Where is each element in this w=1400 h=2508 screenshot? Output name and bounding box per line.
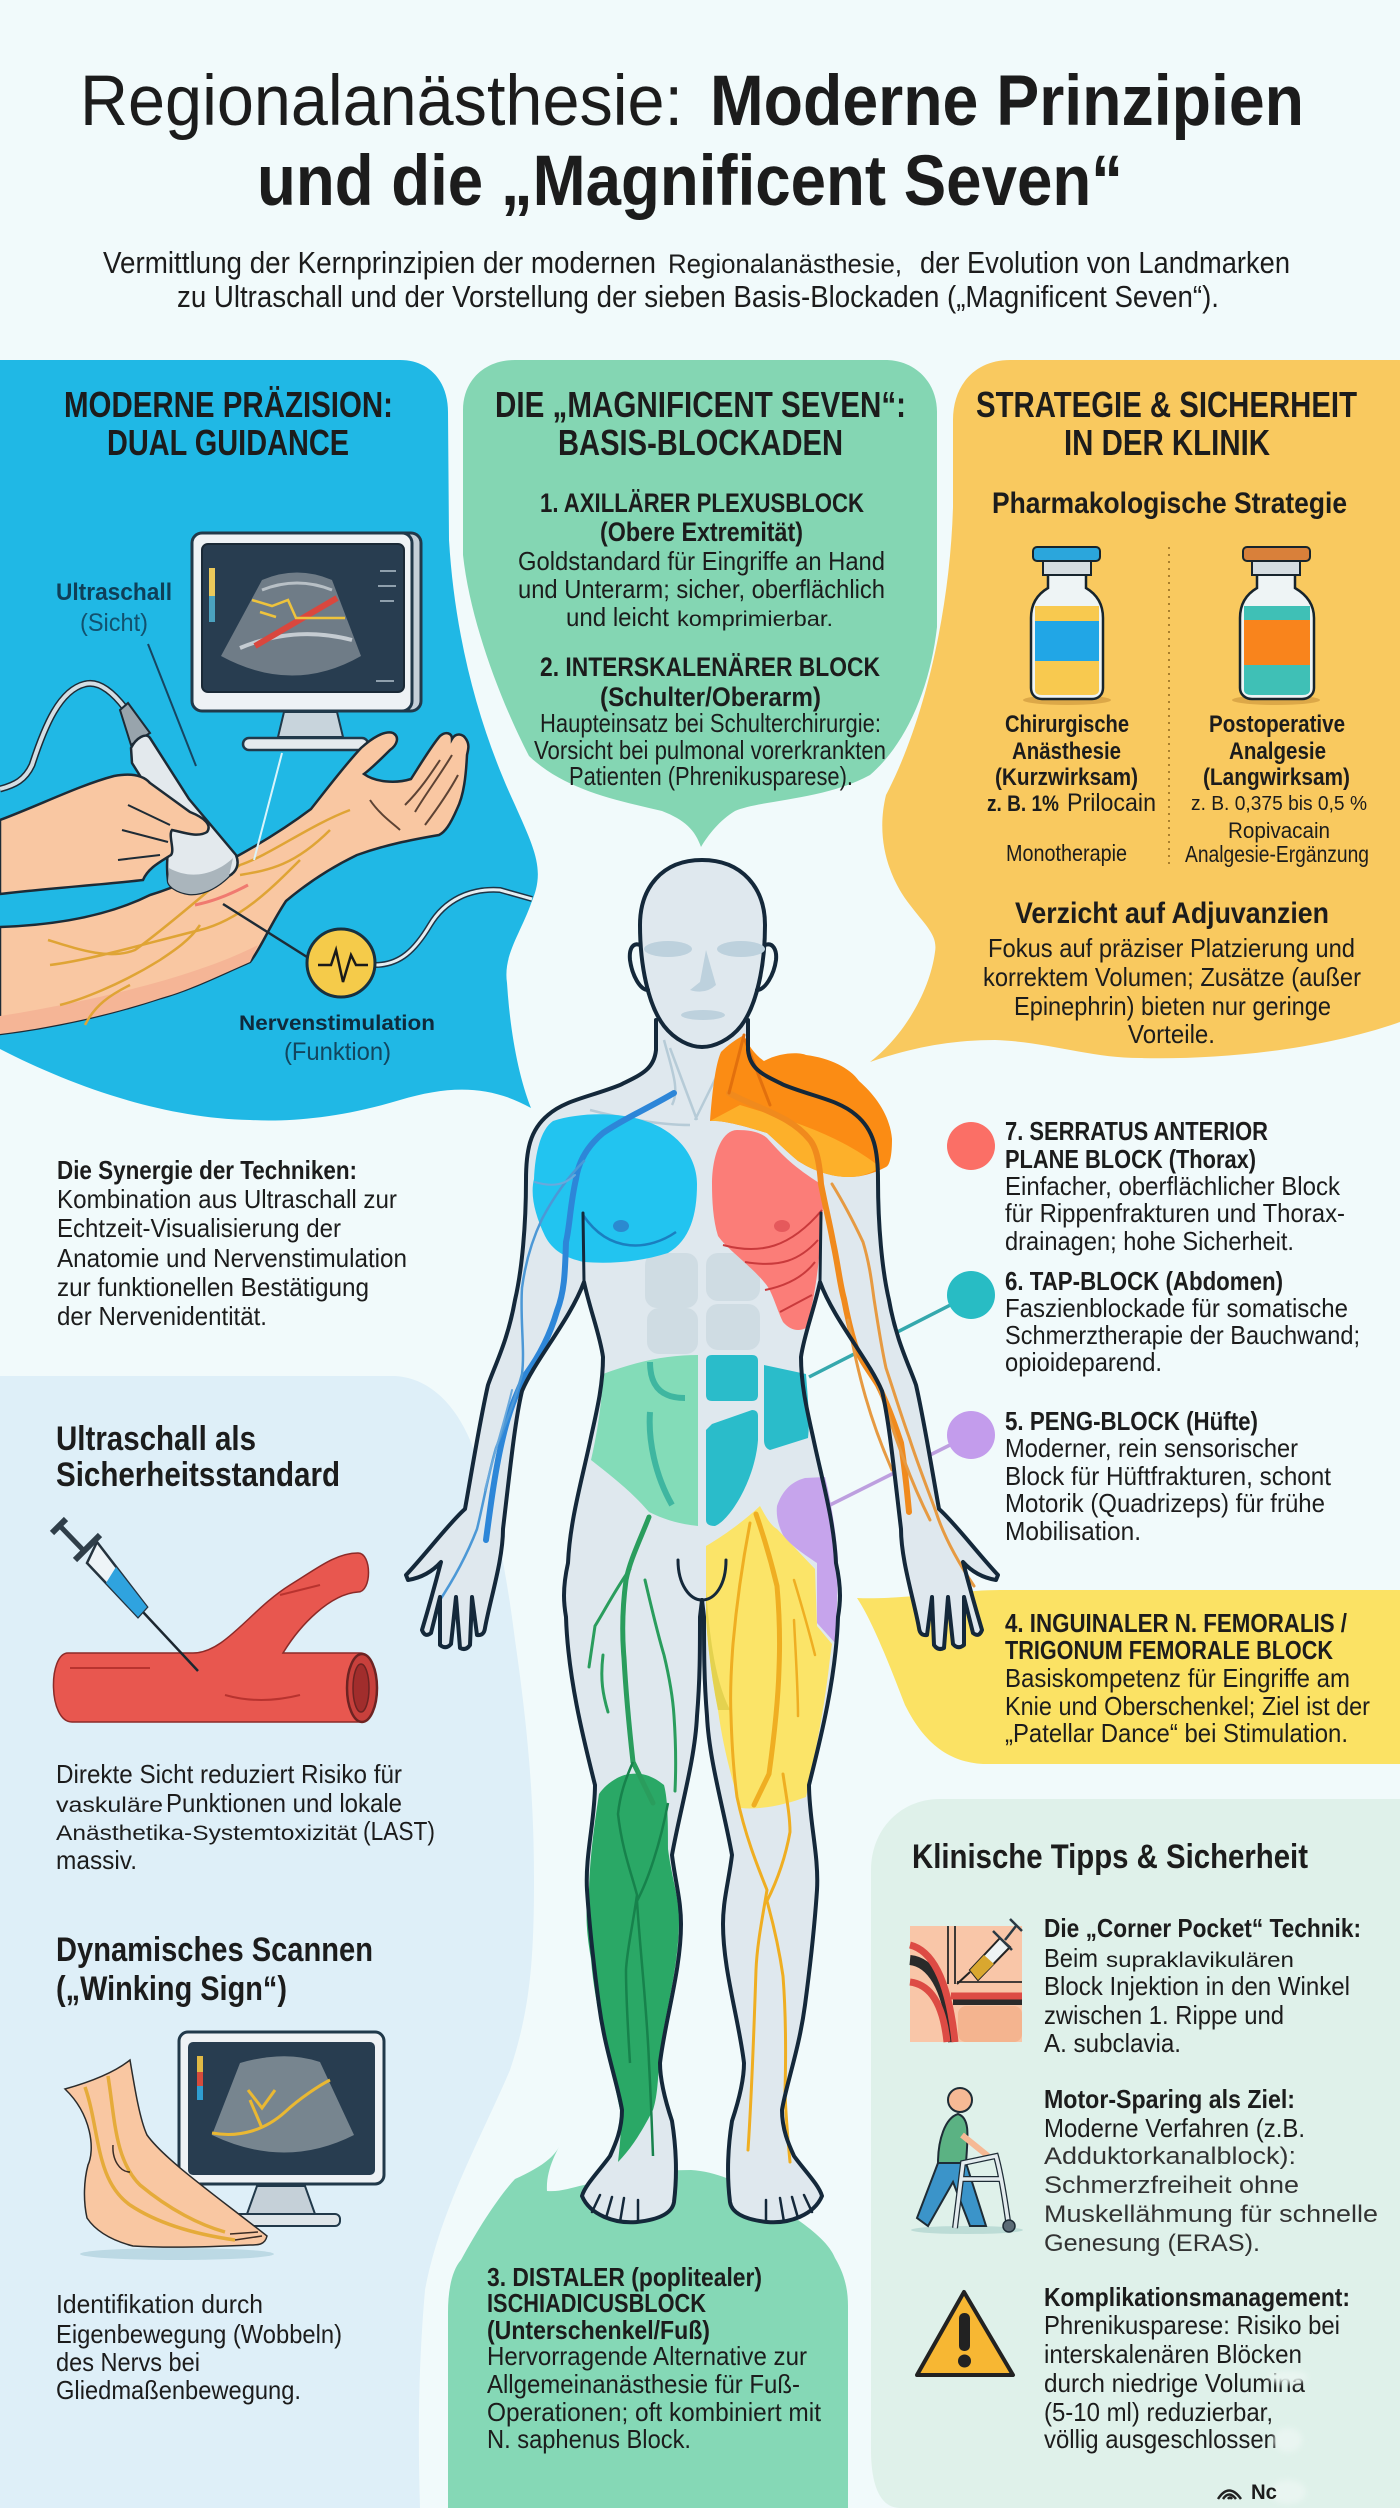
item 6 TAP: Faszienblockade für somatische: [1005, 1293, 1348, 1323]
panel: clinical tips content: [910, 1838, 1378, 2504]
panel: synergy text: Echtzeit-Visualisierung der: [57, 1213, 341, 1243]
text: identification: des Nervs bei: [56, 2347, 200, 2377]
adjuvants text: Epinephrin) bieten nur geringe: [1014, 991, 1331, 1021]
text: corner pocket: A. subclavia.: [1044, 2028, 1181, 2058]
heading: [495, 384, 906, 463]
region: abdomen green: [591, 1355, 698, 1526]
light beam: [254, 753, 282, 860]
heading: [976, 384, 1357, 463]
item 5 PENG: Motorik (Quadrizeps) für frühe: [1005, 1488, 1325, 1518]
icon: probe and hand: [0, 683, 238, 894]
item 4 femoral: [1005, 1608, 1370, 1748]
adjuvants text: Fokus auf präziser Platzierung und: [988, 933, 1355, 963]
icon: patient with walker: [911, 2088, 1023, 2234]
subtitle: [103, 245, 1290, 314]
block 2: Patienten (Phrenikusparese).: [569, 761, 853, 791]
column: surgical anaesthesia: Chirurgische: [1005, 711, 1129, 738]
title: und die „Magnificent Seven“: [257, 142, 1123, 221]
text: motor sparing: Motor-Sparing als Ziel:: [1044, 2084, 1295, 2114]
item 7 serratus: Einfacher, oberflächlicher Block: [1005, 1171, 1341, 1201]
text: sciatic block: ISCHIADICUSBLOCK: [487, 2288, 706, 2318]
panel: safety standard: [0, 1376, 534, 2508]
text: direct view: massiv.: [56, 1845, 137, 1875]
text: motor sparing: Moderne Verfahren (z.B.: [1044, 2113, 1305, 2143]
item 6 TAP: Schmerztherapie der Bauchwand;: [1005, 1320, 1360, 1350]
title: [80, 62, 1304, 221]
icon: patient forearm: [0, 732, 468, 1034]
block 2: Haupteinsatz bei Schulterchirurgie:: [540, 708, 881, 738]
item 5 PENG: Moderner, rein sensorischer: [1005, 1433, 1298, 1463]
panel background: yellow bubble: [870, 360, 1400, 1062]
text: corner pocket: zwischen 1. Rippe und: [1044, 2000, 1284, 2030]
subtitle: der Evolution von Landmarken: [920, 245, 1290, 280]
label: Ultraschall: (Sicht): [80, 609, 148, 637]
heading: Klinische Tipps & Sicherheit: [912, 1838, 1308, 1876]
column: surgical anaesthesia: Prilocain: [1067, 789, 1156, 817]
label: Ultraschall: Ultraschall: [56, 579, 172, 606]
item 5 PENG: [947, 1406, 1332, 1546]
panel background: green bubble: [463, 360, 937, 847]
text: direct view: [56, 1759, 435, 1875]
item 7 serratus: [947, 1116, 1345, 1256]
heading: DUAL GUIDANCE: [107, 422, 349, 463]
column: postoperative analgesia: Ropivacain: [1228, 818, 1330, 843]
text: complication management: (5-10 ml) reduzierbar,: [1044, 2397, 1273, 2427]
text: complication management: Phrenikusparese: Risiko bei: [1044, 2310, 1340, 2340]
block 1: und Unterarm; sicher, oberflächlich: [518, 574, 885, 604]
list: right labels: [947, 1116, 1370, 1748]
label: Nervenstimulation: Nervenstimulation: [239, 1012, 435, 1035]
title: Moderne Prinzipien: [710, 62, 1304, 141]
text: sciatic block: [487, 2262, 822, 2454]
text: direct view: Punktionen und lokale: [166, 1788, 402, 1818]
subtitle: Regionalanästhesie,: [668, 249, 902, 279]
text: sciatic block: Hervorragende Alternative zur: [487, 2341, 807, 2371]
connector lines: [809, 1295, 970, 1505]
column: surgical anaesthesia: Anästhesie: [1012, 738, 1121, 765]
heading: dynamic scanning: („Winking Sign“): [56, 1970, 287, 2008]
text: corner pocket: [1044, 1913, 1361, 2058]
column: postoperative analgesia: Analgesie: [1229, 738, 1326, 765]
text: corner pocket: Die „Corner Pocket“ Technik:: [1044, 1913, 1361, 1943]
icon: nerve stimulator: [223, 890, 532, 997]
panel: synergy text: Anatomie und Nervenstimulation: [57, 1243, 407, 1273]
block 2: [534, 652, 886, 791]
item 4 femoral: „Patellar Dance“ bei Stimulation.: [1005, 1718, 1348, 1748]
block 2: Vorsicht bei pulmonal vorerkrankten: [534, 735, 886, 765]
text: identification: Gliedmaßenbewegung.: [56, 2375, 301, 2405]
icon: syringe and vessel: [52, 1519, 377, 1722]
region: femoral yellow: [706, 1506, 832, 1808]
item 4 femoral: Basiskompetenz für Eingriffe am: [1005, 1663, 1350, 1693]
heading: [56, 1420, 340, 1494]
footer label: [1218, 2481, 1277, 2504]
text: complication management: [1044, 2282, 1350, 2454]
block 1: Goldstandard für Eingriffe an Hand: [518, 546, 885, 576]
text: direct view: Direkte Sicht reduziert Risiko für: [56, 1759, 402, 1789]
item 4 femoral: Knie und Oberschenkel; Ziel ist der: [1005, 1691, 1370, 1721]
block 1: [518, 488, 885, 632]
panel: dual guidance: [0, 360, 538, 1120]
column: surgical anaesthesia: Monotherapie: [1006, 840, 1127, 866]
subtitle: Vermittlung der Kernprinzipien der modernen: [103, 245, 656, 280]
panel: synergy text: Die Synergie der Techniken:: [57, 1155, 357, 1185]
column: postoperative analgesia: Analgesie-Ergänzung: [1185, 841, 1369, 867]
text: motor sparing: Muskellähmung für schnelle: [1044, 2201, 1378, 2228]
retouched patches: [1268, 2371, 1308, 2504]
heading: Ultraschall als: [56, 1420, 256, 1458]
block 1: (Obere Extremität): [600, 517, 803, 547]
region: interscalene orange: [710, 1035, 892, 1177]
title: Regionalanästhesie:: [80, 62, 683, 141]
text: complication management: interskalenären Blöcken: [1044, 2339, 1302, 2369]
adjuvants text: Vorteile.: [1128, 1019, 1215, 1049]
heading: BASIS-BLOCKADEN: [558, 422, 843, 463]
text: motor sparing: Adduktorkanalblock):: [1044, 2143, 1296, 2170]
footer label: Nc: [1251, 2481, 1277, 2504]
text: sciatic block: Allgemeinanästhesie für Fuß-: [487, 2369, 800, 2399]
text: complication management: völlig ausgeschlossen: [1044, 2424, 1277, 2454]
item 5 PENG: 5. PENG-BLOCK (Hüfte): [1005, 1406, 1258, 1436]
text: identification: [56, 2289, 342, 2405]
label: Nervenstimulation: (Funktion): [284, 1038, 391, 1066]
item 6 TAP: opioideparend.: [1005, 1347, 1162, 1377]
item 5 PENG: Block für Hüftfrakturen, schont: [1005, 1461, 1332, 1491]
column: postoperative analgesia: z. B. 0,375 bis 0,5 %: [1191, 793, 1367, 815]
text: complication management: durch niedrige Volumina: [1044, 2368, 1305, 2398]
item 6 TAP: 6. TAP-BLOCK (Abdomen): [1005, 1266, 1283, 1296]
block 1: komprimierbar.: [677, 608, 833, 631]
item 4 femoral: 4. INGUINALER N. FEMORALIS /: [1005, 1608, 1347, 1638]
nerves: orange: [729, 1035, 974, 1586]
heading: IN DER KLINIK: [1064, 422, 1270, 463]
adjuvants text: korrektem Volumen; Zusätze (außer: [983, 962, 1361, 992]
subtitle: zu Ultraschall und der Vorstellung der sieben Basis-Blockaden („Magnificent Seven“).: [177, 279, 1219, 314]
text: motor sparing: [1044, 2084, 1378, 2257]
subheading: Pharmakologische Strategie: [992, 487, 1347, 520]
panel: synergy text: [57, 1155, 407, 1331]
column: surgical anaesthesia: z. B. 1%: [987, 791, 1059, 816]
item 7 serratus: 7. SERRATUS ANTERIOR: [1005, 1116, 1268, 1146]
text: corner pocket: Beim: [1044, 1943, 1098, 1973]
text: corner pocket: supraklavikulären: [1106, 1949, 1294, 1972]
column: surgical anaesthesia: [987, 711, 1156, 866]
item 7 serratus: für Rippenfrakturen und Thorax-: [1005, 1198, 1345, 1228]
column: postoperative analgesia: Postoperative: [1209, 711, 1345, 738]
heading: dynamic scanning: [56, 1931, 373, 2008]
region: serratus red: [712, 1130, 823, 1330]
neck and collarbone shading: [590, 1040, 732, 1125]
block 2: 2. INTERSKALENÄRER BLOCK: [540, 652, 880, 682]
column: surgical anaesthesia: (Kurzwirksam): [995, 764, 1138, 791]
icon: monitor and foot: [65, 2032, 384, 2260]
panel: femoral block yellow: [857, 1590, 1400, 1764]
item 7 serratus: drainagen; hohe Sicherheit.: [1005, 1226, 1294, 1256]
face: [644, 941, 765, 1020]
nerves: blue: [438, 1093, 674, 1603]
toes: [592, 2195, 812, 2222]
body outline: [406, 860, 998, 2222]
panel: strategy: [870, 360, 1400, 1062]
nerves: green: [589, 1517, 676, 1803]
label: Ultraschall: [56, 579, 172, 637]
icon: vial long-acting: [1232, 547, 1320, 705]
region: sciatic green: [587, 1774, 679, 2162]
panel: clinical tips background: [871, 1799, 1400, 2508]
panel background: blue bubble: [0, 360, 538, 1120]
adjuvants text: [983, 897, 1361, 1049]
panel: synergy text: der Nervenidentität.: [57, 1301, 267, 1331]
heading: DIE „MAGNIFICENT SEVEN“:: [495, 384, 906, 425]
panel: synergy text: Kombination aus Ultraschall zur: [57, 1184, 397, 1214]
block 1: und leicht: [566, 602, 670, 632]
icon: corner pocket: [910, 1919, 1022, 2042]
text: sciatic block: (Unterschenkel/Fuß): [487, 2315, 710, 2345]
text: identification: Identifikation durch: [56, 2289, 263, 2319]
heading: dynamic scanning: Dynamisches Scannen: [56, 1931, 373, 1969]
nerves: yellow: [731, 1514, 815, 2162]
item 4 femoral: TRIGONUM FEMORALE BLOCK: [1005, 1635, 1333, 1665]
column: postoperative analgesia: [1185, 711, 1369, 867]
divider: [1168, 547, 1170, 866]
heading: Sicherheitsstandard: [56, 1456, 340, 1494]
text: direct view: (LAST): [363, 1816, 435, 1846]
text: identification: Eigenbewegung (Wobbeln): [56, 2319, 342, 2349]
item 5 PENG: Mobilisation.: [1005, 1516, 1141, 1546]
icon: warning triangle: [917, 2292, 1013, 2375]
text: complication management: Komplikationsmanagement:: [1044, 2282, 1350, 2312]
text: corner pocket: Block Injektion in den Winkel: [1044, 1971, 1350, 2001]
text: sciatic block: Operationen; oft kombiniert mit: [487, 2397, 822, 2427]
text: direct view: Anästhetika-Systemtoxizität: [56, 1822, 357, 1845]
item 6 TAP: [947, 1266, 1360, 1377]
item 7 serratus: PLANE BLOCK (Thorax): [1005, 1144, 1256, 1174]
abdominal muscles: [645, 1253, 760, 1354]
column: postoperative analgesia: (Langwirksam): [1203, 764, 1350, 791]
text: motor sparing: Schmerzfreiheit ohne: [1044, 2172, 1299, 2199]
panel background: light blue: [0, 1376, 534, 2508]
panel: sciatic block green: [448, 2147, 848, 2508]
region: abdomen teal: [706, 1355, 809, 1526]
text: direct view: vaskuläre: [56, 1794, 163, 1817]
body figure: [406, 860, 998, 2222]
panel: synergy text: zur funktionellen Bestätigung: [57, 1272, 369, 1302]
icon: vial short-acting: [1023, 547, 1111, 705]
block 2: (Schulter/Oberarm): [600, 682, 821, 712]
panel: magnificent seven: [463, 360, 937, 847]
callout line: [148, 644, 196, 766]
icon: ultrasound monitor: [192, 533, 421, 750]
heading: [64, 384, 393, 463]
body base: [406, 860, 998, 2222]
region: axillary blue: [533, 1114, 697, 1263]
region: peng purple: [777, 1477, 838, 1644]
adjuvants text: Verzicht auf Adjuvanzien: [1015, 897, 1329, 930]
label: Nervenstimulation: [239, 1012, 435, 1066]
heading: MODERNE PRÄZISION:: [64, 384, 393, 425]
text: sciatic block: N. saphenus Block.: [487, 2424, 691, 2454]
block 1: 1. AXILLÄRER PLEXUSBLOCK: [540, 488, 864, 518]
text: motor sparing: Genesung (ERAS).: [1044, 2230, 1260, 2257]
text: sciatic block: 3. DISTALER (poplitealer): [487, 2262, 762, 2292]
